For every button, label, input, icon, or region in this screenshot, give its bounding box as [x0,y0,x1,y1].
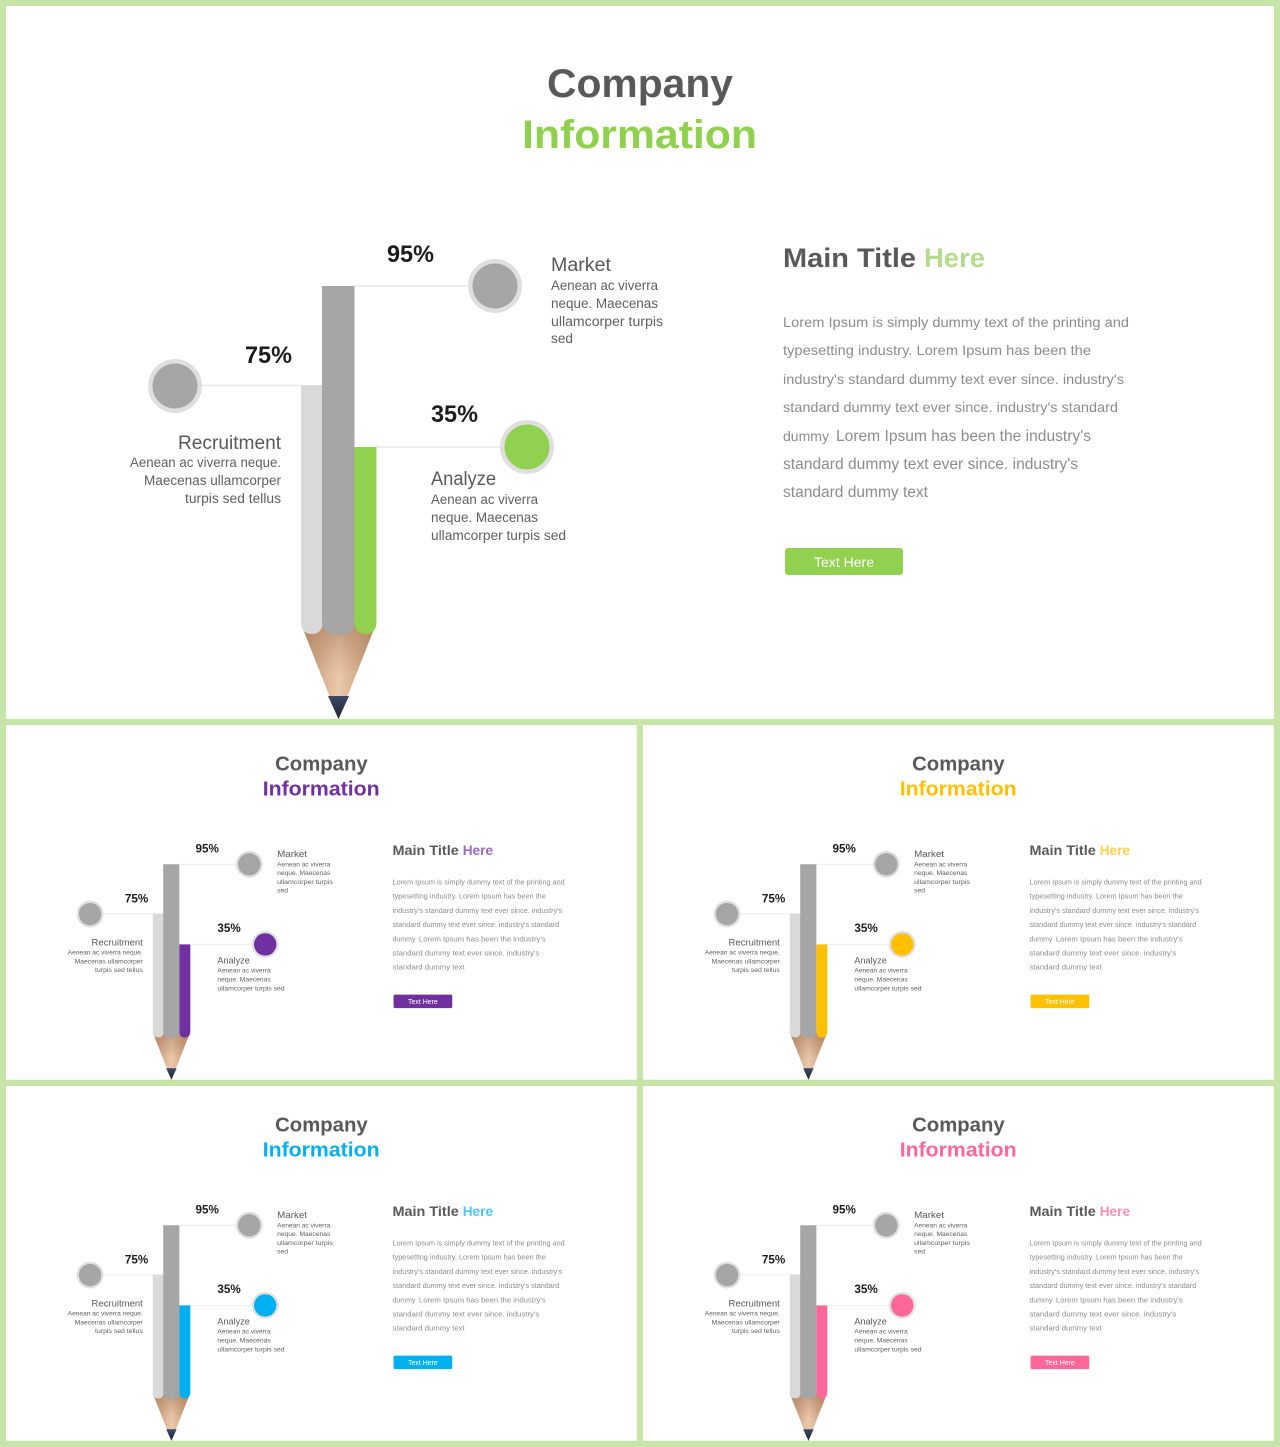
heading: main title: Here [1100,843,1130,858]
text: analyze: ullamcorper turpis sed [217,986,285,993]
text: market: Aenean ac viverra [277,1222,331,1229]
body paragraph: standard dummy text [783,484,929,501]
circle: market [236,1212,263,1239]
body paragraph: Lorem Ipsum is simply dummy text of the printing and [1030,1241,1202,1248]
text: analyze: neque. Maecenas [431,510,538,525]
text: market: Aenean ac viverra [551,278,658,293]
button [1031,995,1089,1008]
bar: analyze 35% [179,944,190,1037]
percentage labels: 95% [833,1202,856,1216]
body paragraph: Lorem Ipsum has been the industry's [419,934,546,943]
text: market [277,849,334,895]
bar: analyze 35% [179,1305,190,1398]
body paragraph: standard dummy text [1030,1323,1103,1332]
heading: main title: Here [924,243,985,273]
text: analyze: neque. Maecenas [217,1338,271,1345]
text: recruitment: Aenean ac viverra neque. [130,455,281,470]
text: recruitment: Maecenas ullamcorper [75,958,144,965]
title: Company [547,62,734,106]
percentage labels: 75% [125,1253,149,1267]
text: analyze: Aenean ac viverra [854,968,908,975]
text: recruitment [705,1298,781,1335]
title: Company [275,753,368,775]
text: market: Aenean ac viverra [914,861,968,868]
bar: recruitment 75% [790,914,801,1037]
heading: main title: Main Title [783,243,916,273]
heading: main title: Main Title [1030,843,1096,858]
text: analyze [431,469,566,543]
circle: recruitment [148,359,202,413]
body paragraph: standard dummy text [393,1323,466,1332]
body paragraph [783,314,1129,501]
pencil tip [153,1032,190,1080]
text: market: neque. Maecenas [277,870,331,877]
body paragraph [393,880,565,971]
text: recruitment: Aenean ac viverra neque. [705,1310,780,1317]
text: recruitment: Maecenas ullamcorper [75,1319,144,1326]
body paragraph: typesetting industry. Lorem Ipsum has been the [393,1255,546,1262]
percentage labels: 95% [387,241,434,268]
text: market: Aenean ac viverra [914,1222,968,1229]
button: Text Here [814,554,874,570]
percentage labels: 75% [245,342,292,369]
button: Text Here [408,1360,438,1367]
heading: main title [783,243,985,273]
text: recruitment [705,937,781,974]
body paragraph: industry's standard dummy text ever since. industry's [1030,908,1200,915]
text: analyze: Analyze [854,1316,887,1327]
text: analyze: Aenean ac viverra [217,968,271,975]
text: recruitment [130,433,282,506]
button: Text Here [1045,1360,1075,1367]
panel: large green slide [6,6,1274,719]
pencil chart [103,864,252,1080]
text: recruitment: turpis sed tellus [95,1328,143,1335]
panel: pink slide [643,1086,1274,1441]
text: recruitment: turpis sed tellus [95,967,143,974]
percentage labels [125,1202,241,1296]
heading: main title: Here [463,1204,493,1219]
bar: market 95% [800,864,816,1038]
title: Company [275,1114,368,1136]
heading: main title: Main Title [393,1204,459,1219]
circle: analyze [252,931,279,958]
heading: main title: Main Title [1030,1204,1096,1219]
text: market: sed [914,888,925,895]
body paragraph: Lorem Ipsum is simply dummy text of the printing and [393,880,565,887]
title: Company [912,1114,1005,1136]
text: recruitment: Maecenas ullamcorper [144,473,282,488]
bar: recruitment 75% [153,914,164,1037]
title: Information [900,779,1017,801]
bar: market 95% [800,1225,816,1399]
circle: analyze [252,1292,279,1319]
title: Company [912,753,1005,775]
title [522,62,757,157]
text: recruitment: Maecenas ullamcorper [712,958,781,965]
button: Text Here [408,999,438,1006]
body paragraph: standard dummy text ever since. industry's [1030,948,1176,957]
circle: market [873,1212,900,1239]
text: market: Market [551,255,612,276]
text: market: neque. Maecenas [551,296,658,311]
heading: main title [1030,843,1130,858]
text: analyze [854,1316,922,1354]
circle: market [873,851,900,878]
bar: analyze 35% [816,1305,827,1398]
text: analyze: Analyze [431,469,496,490]
body paragraph: dummy [393,936,416,943]
text: market: ullamcorper turpis [277,1240,334,1247]
button [394,1356,452,1369]
percentage labels: 35% [431,401,478,428]
circle: analyze [889,931,916,958]
button: Text Here [1045,999,1075,1006]
body paragraph: Lorem Ipsum has been the industry's [1056,934,1183,943]
button [785,548,903,575]
text: recruitment: Recruitment [729,1298,780,1309]
bar: recruitment 75% [790,1275,801,1398]
percentage labels: 35% [854,921,878,935]
heading: main title [1030,1204,1130,1219]
text: analyze: Aenean ac viverra [854,1329,908,1336]
body paragraph [1030,1241,1202,1332]
circle: market [236,851,263,878]
title: Information [522,113,757,157]
percentage labels [245,241,478,428]
text: analyze: neque. Maecenas [217,977,271,984]
text: recruitment: Aenean ac viverra neque. [705,949,780,956]
text: analyze: neque. Maecenas [854,977,908,984]
text: recruitment: Recruitment [92,937,143,948]
title: Information [900,1140,1017,1162]
percentage labels: 75% [762,892,786,906]
bar: market 95% [163,864,179,1038]
bar: analyze 35% [816,944,827,1037]
pencil chart [103,1225,252,1441]
text: analyze [854,955,922,993]
body paragraph: standard dummy text ever since. industry's standard [393,1283,559,1290]
text: market: neque. Maecenas [914,1231,968,1238]
title: Information [263,1140,380,1162]
text: recruitment: Recruitment [92,1298,143,1309]
body paragraph: dummy [1030,936,1053,943]
text: analyze [217,1316,285,1354]
title [263,753,380,801]
text: analyze: neque. Maecenas [854,1338,908,1345]
text: market: Market [914,849,944,860]
text: analyze: Analyze [217,955,250,966]
button [394,995,452,1008]
body paragraph: Lorem Ipsum has been the industry's [836,428,1091,445]
body paragraph: Lorem Ipsum is simply dummy text of the printing and [1030,880,1202,887]
text: market: Market [277,849,307,860]
pencil chart [740,1225,889,1441]
bar: analyze 35% [354,447,376,634]
title [900,753,1017,801]
text: market: sed [277,1249,288,1256]
text: analyze: Analyze [854,955,887,966]
text: analyze: Analyze [217,1316,250,1327]
text: market [551,255,663,346]
body paragraph: typesetting industry. Lorem Ipsum has been the [783,342,1091,358]
body paragraph: standard dummy text ever since. industry's [1030,1309,1176,1318]
percentage labels: 95% [196,841,219,855]
text: market: ullamcorper turpis [914,879,971,886]
bar: market 95% [322,286,354,635]
text: recruitment [68,937,144,974]
body paragraph: standard dummy text ever since. industry's standard [1030,922,1196,929]
body paragraph [393,1241,565,1332]
text: analyze: ullamcorper turpis sed [854,986,922,993]
text: market: neque. Maecenas [277,1231,331,1238]
percentage labels: 95% [833,841,856,855]
percentage labels: 75% [125,892,149,906]
text: analyze: ullamcorper turpis sed [854,1347,922,1354]
body paragraph: Lorem Ipsum has been the industry's [419,1295,546,1304]
pencil chart [740,864,889,1080]
text: recruitment: turpis sed tellus [732,967,780,974]
body paragraph: standard dummy text [393,962,466,971]
panel: purple slide [6,725,637,1080]
percentage labels: 35% [217,921,241,935]
body paragraph: typesetting industry. Lorem Ipsum has been the [1030,894,1183,901]
title: Information [263,779,380,801]
body paragraph: Lorem Ipsum is simply dummy text of the printing and [393,1241,565,1248]
text: market: Aenean ac viverra [277,861,331,868]
text: analyze: ullamcorper turpis sed [217,1347,285,1354]
heading: main title: Main Title [393,843,459,858]
circle: recruitment [714,901,741,927]
text: analyze: ullamcorper turpis sed [431,528,566,543]
heading: main title: Here [463,843,493,858]
heading: main title [393,1204,493,1219]
body paragraph: standard dummy text ever since. industry's standard [783,399,1118,415]
circle: recruitment [77,901,104,927]
text: recruitment: Maecenas ullamcorper [712,1319,781,1326]
heading: main title: Here [1100,1204,1130,1219]
text: recruitment: Aenean ac viverra neque. [68,1310,143,1317]
percentage labels [125,841,241,935]
text: market: ullamcorper turpis [551,314,663,329]
bar: market 95% [163,1225,179,1399]
text: analyze [217,955,285,993]
text: analyze: Aenean ac viverra [431,492,538,507]
text: market: ullamcorper turpis [914,1240,971,1247]
text: recruitment: Recruitment [729,937,780,948]
percentage labels: 35% [854,1282,878,1296]
pencil tip [790,1032,827,1080]
circle: analyze [500,420,554,474]
text: market: ullamcorper turpis [277,879,334,886]
body paragraph: standard dummy text [1030,962,1103,971]
pencil chart [200,286,501,719]
circle: analyze [889,1292,916,1319]
body paragraph: industry's standard dummy text ever since. industry's [393,1269,563,1276]
body paragraph: standard dummy text ever since. industry's standard [1030,1283,1196,1290]
body paragraph: standard dummy text ever since. industry's [393,948,539,957]
percentage labels [762,841,878,935]
text: market: sed [277,888,288,895]
title [263,1114,380,1162]
body paragraph: standard dummy text ever since. industry's [393,1309,539,1318]
body paragraph: typesetting industry. Lorem Ipsum has been the [393,894,546,901]
panel: blue slide [6,1086,637,1441]
body paragraph: Lorem Ipsum has been the industry's [1056,1295,1183,1304]
pencil tip [790,1393,827,1441]
body paragraph: dummy [393,1297,416,1304]
text: market [914,849,971,895]
body paragraph: typesetting industry. Lorem Ipsum has been the [1030,1255,1183,1262]
title [900,1114,1017,1162]
text: market: Market [277,1210,307,1221]
body paragraph [1030,880,1202,971]
body paragraph: standard dummy text ever since. industry's standard [393,922,559,929]
text: recruitment: turpis sed tellus [732,1328,780,1335]
percentage labels: 95% [196,1202,219,1216]
percentage labels: 35% [217,1282,241,1296]
pencil tip [301,624,376,719]
percentage labels: 75% [762,1253,786,1267]
percentage labels [762,1202,878,1296]
circle: recruitment [714,1262,741,1288]
text: analyze: Aenean ac viverra [217,1329,271,1336]
body paragraph: industry's standard dummy text ever since. industry's [783,371,1124,387]
body paragraph: dummy [1030,1297,1053,1304]
text: market: neque. Maecenas [914,870,968,877]
text: market [914,1210,971,1256]
bar: recruitment 75% [153,1275,164,1398]
text: recruitment: Recruitment [178,433,282,454]
text: recruitment: turpis sed tellus [185,491,281,506]
body paragraph: standard dummy text ever since. industry's [783,456,1078,473]
heading: main title [393,843,493,858]
button [1031,1356,1089,1369]
circle: recruitment [77,1262,104,1288]
body paragraph: industry's standard dummy text ever since. industry's [1030,1269,1200,1276]
circle: market [468,259,522,313]
text: market: Market [914,1210,944,1221]
pencil tip [153,1393,190,1441]
text: recruitment: Aenean ac viverra neque. [68,949,143,956]
body paragraph: dummy [783,428,829,444]
panel: yellow slide [643,725,1274,1080]
body paragraph: industry's standard dummy text ever since. industry's [393,908,563,915]
bar: recruitment 75% [301,385,323,634]
text: recruitment [68,1298,144,1335]
text: market: sed [914,1249,925,1256]
text: market: sed [551,331,573,346]
text: market [277,1210,334,1256]
body paragraph: Lorem Ipsum is simply dummy text of the printing and [783,314,1129,330]
